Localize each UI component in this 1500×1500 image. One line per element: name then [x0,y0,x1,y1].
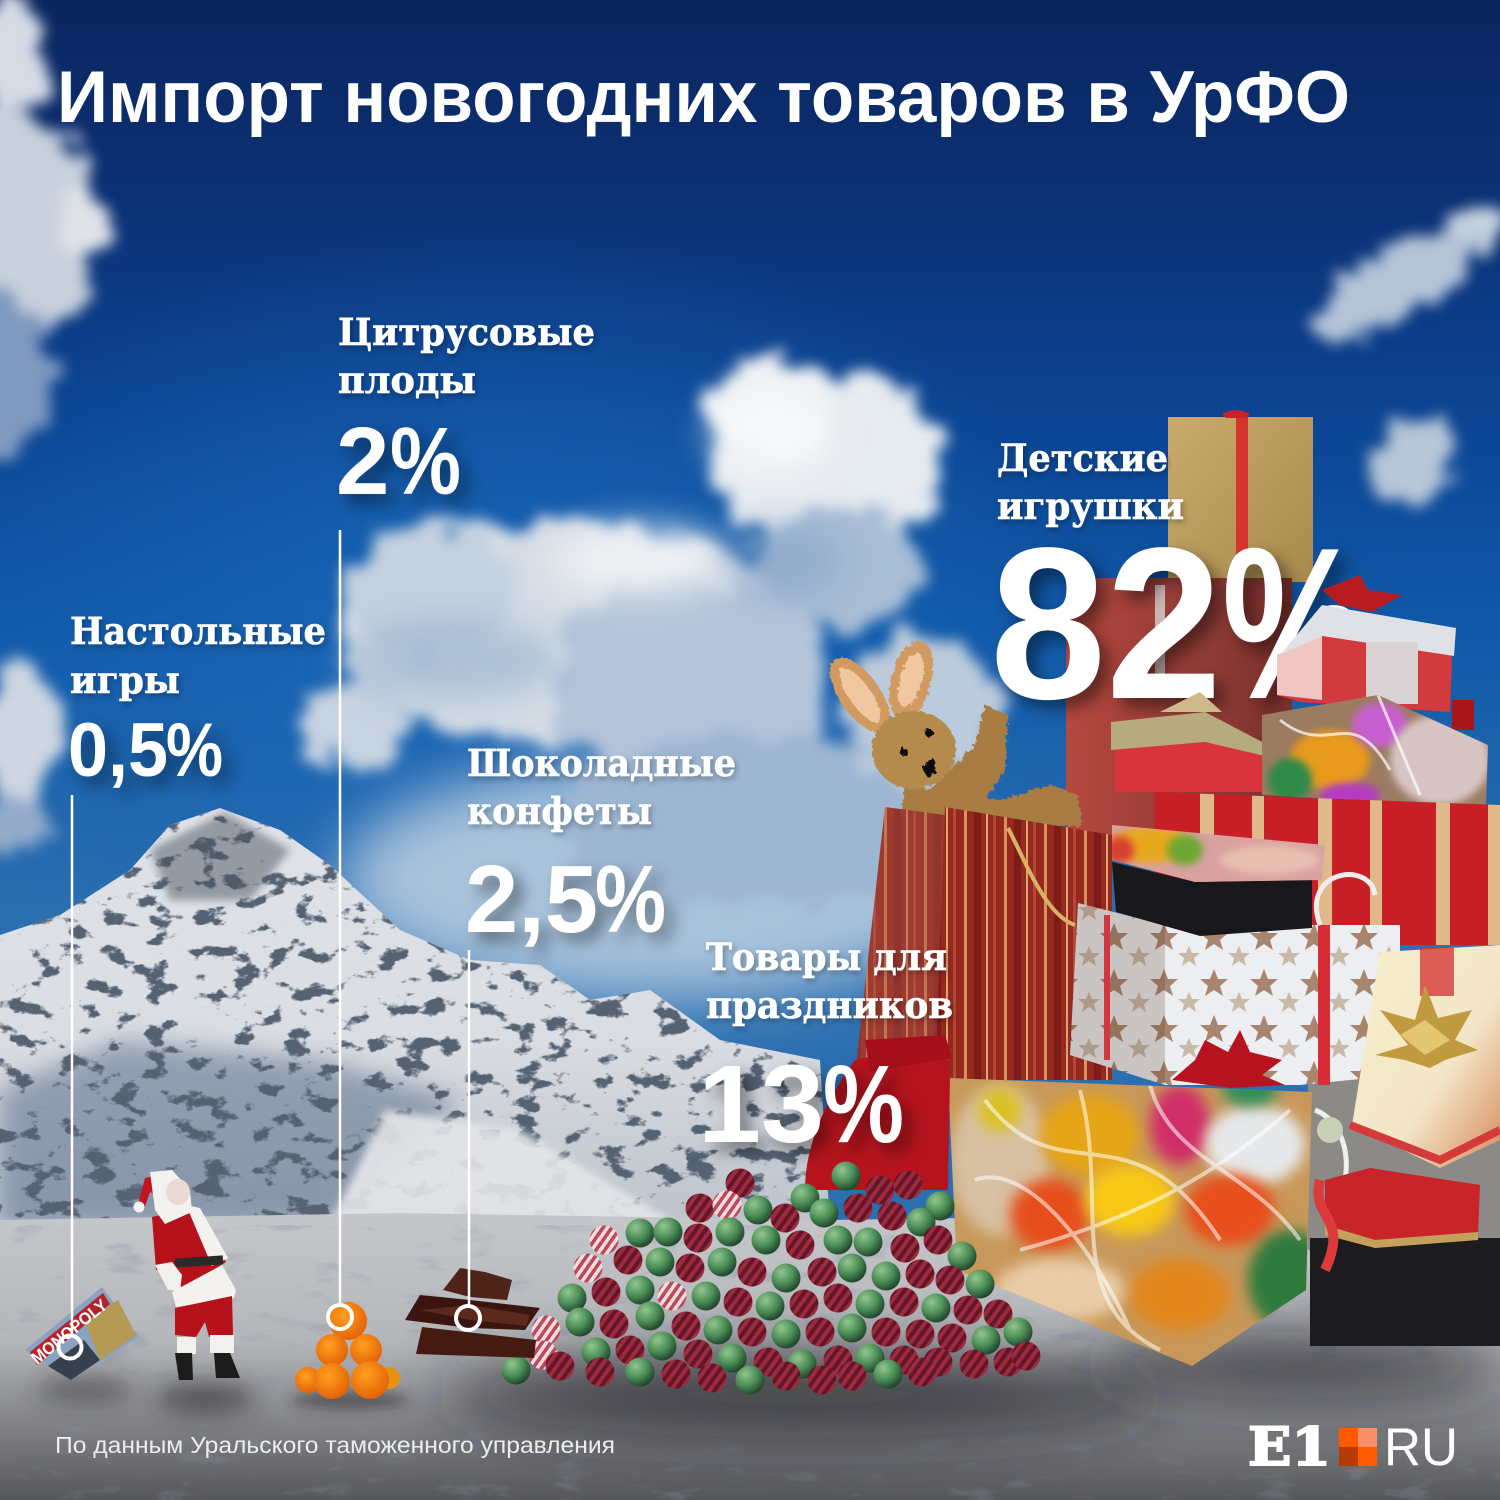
callout: toys label: Детские [997,436,1168,480]
gift: gold-white box with gold bow [1350,945,1500,1168]
gift: large iridescent box [945,1074,1332,1370]
gift: long red box with gold stripes [1155,790,1500,945]
callout: citrus: плоды [338,358,476,402]
callout: citrus: % [390,408,461,515]
callout: chocolates [456,741,736,1330]
callout: holiday goods: % [823,1043,904,1166]
icon: toy bunny [818,636,1082,826]
callout: citrus [328,310,595,1329]
mountains [0,808,830,1225]
snow ground [0,1210,1500,1500]
icon: Santa Claus [134,1170,240,1380]
shopping bag with toy bunny [818,636,1112,1080]
callout: citrus: Цитрусовые [338,310,595,354]
logo: E1.RU: RU [1384,1418,1458,1477]
callout: holiday goods: праздников [706,983,953,1027]
icon: tangerine pyramid [295,1302,400,1399]
gift: star-wrapped box [1065,875,1405,1090]
callout: chocolates: Шоколадные [467,741,736,785]
callout: holiday goods: 13 [698,1043,824,1166]
callout: board games: % [166,708,223,793]
logo: E1.RU [1248,1417,1458,1478]
gift: large red box [1066,578,1292,840]
callout: board games: Настольные [70,609,326,653]
gift: white box with red base and bow [1277,575,1474,730]
gift: iridescent lid with black box [1106,820,1330,936]
value: 82% [990,502,1366,744]
icon: chocolate pieces [405,1268,540,1358]
callout: toys label [997,436,1184,528]
value: 82%: % [1222,502,1366,744]
callout: board games [58,609,326,1358]
callout: board games: 0,5 [68,708,168,793]
red sack [805,1035,952,1190]
gift: small red box with dotted lid [1111,692,1268,792]
callout: chocolates: конфеты [467,789,652,833]
gift: iridescent wrapped box [1262,695,1488,804]
callout: citrus: 2 [336,408,389,515]
callout: holiday goods [698,935,953,1166]
callout: holiday goods: Товары для [706,935,947,979]
icon: red bow [1172,1030,1285,1088]
candy ball pile [502,1162,1040,1394]
callout: board games: игры [70,658,180,702]
logo: E1.RU: E1 [1248,1417,1331,1478]
icon: board game box: MONOPOLY [28,1295,111,1368]
callout: toys label: игрушки [997,484,1184,528]
callout: chocolates: 2,5 [465,846,598,953]
gift: gold box with red ribbon [1168,410,1313,582]
icon: board game box [25,1287,139,1380]
callout: chocolates: % [595,846,666,953]
value: 82%: 82 [990,502,1222,744]
gift: red box with gold trim on black box [1310,1168,1500,1346]
source note: По данным Уральского таможенного управления [55,1432,615,1458]
clouds [0,0,1500,1000]
title: Импорт новогодних товаров в УрФО [57,57,1350,138]
gap filler: ribbons behind stacked gifts [1308,1070,1500,1250]
